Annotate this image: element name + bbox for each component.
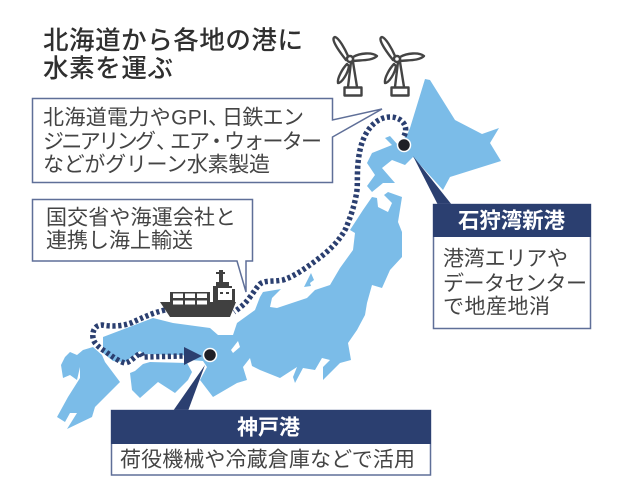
Shikoku — [130, 362, 192, 398]
callout: maritime transport — [32, 200, 252, 292]
arrowhead — [184, 347, 202, 365]
callout: hydrogen production: ・ — [206, 130, 227, 154]
route: dotted shipping line — [93, 117, 406, 363]
title — [43, 27, 303, 83]
panel header — [111, 410, 431, 444]
port marker: Ishikari — [398, 138, 410, 152]
callout: hydrogen production: 、 — [208, 106, 229, 130]
leader: Kobe — [173, 365, 205, 411]
panel text: 港湾エリアや — [443, 248, 568, 270]
callout: hydrogen production: 北海道電力やGPI — [43, 106, 208, 130]
callout: hydrogen production: エア — [170, 130, 210, 154]
callout: hydrogen production: 日鉄エン — [222, 106, 304, 130]
Lake Biwa — [231, 341, 240, 353]
callout: hydrogen production: ウォーター — [224, 130, 322, 154]
callout: hydrogen production: 、 — [156, 130, 177, 154]
callout: maritime transport: 国交省や海運会社と — [46, 206, 236, 230]
Kyushu — [57, 347, 120, 429]
panel header: 神戸港 — [237, 416, 300, 440]
panel text: で地産地消 — [443, 296, 550, 318]
panel header — [433, 204, 591, 237]
map of Japan — [57, 79, 501, 429]
callout: hydrogen production: ジニアリング — [43, 130, 156, 154]
title: 水素を運ぶ — [43, 55, 173, 83]
panel text: 荷役機械や冷蔵倉庫などで活用 — [120, 448, 415, 472]
panel text — [443, 248, 587, 318]
title: 北海道から各地の港に — [43, 27, 303, 55]
panel text: データセンター — [443, 272, 587, 296]
icon: cargo ship — [160, 270, 236, 317]
leader: Ishikari — [413, 156, 452, 205]
turbine 1 — [333, 37, 377, 96]
panel: Kobe Port — [111, 410, 431, 475]
callout: hydrogen production — [32, 98, 382, 182]
Sado island — [304, 273, 314, 287]
icon: wind turbines — [333, 37, 424, 96]
callout: maritime transport: 連携し海上輸送 — [46, 230, 193, 252]
turbine 2 — [380, 37, 424, 96]
port marker: Kobe — [204, 348, 216, 362]
callout: hydrogen production: などがグリーン水素製造 — [43, 154, 270, 176]
Honshu — [103, 192, 402, 397]
Hokkaido — [367, 79, 501, 192]
panel header: 石狩湾新港 — [458, 209, 565, 233]
panel: Ishikari Bay New Port — [433, 204, 591, 328]
